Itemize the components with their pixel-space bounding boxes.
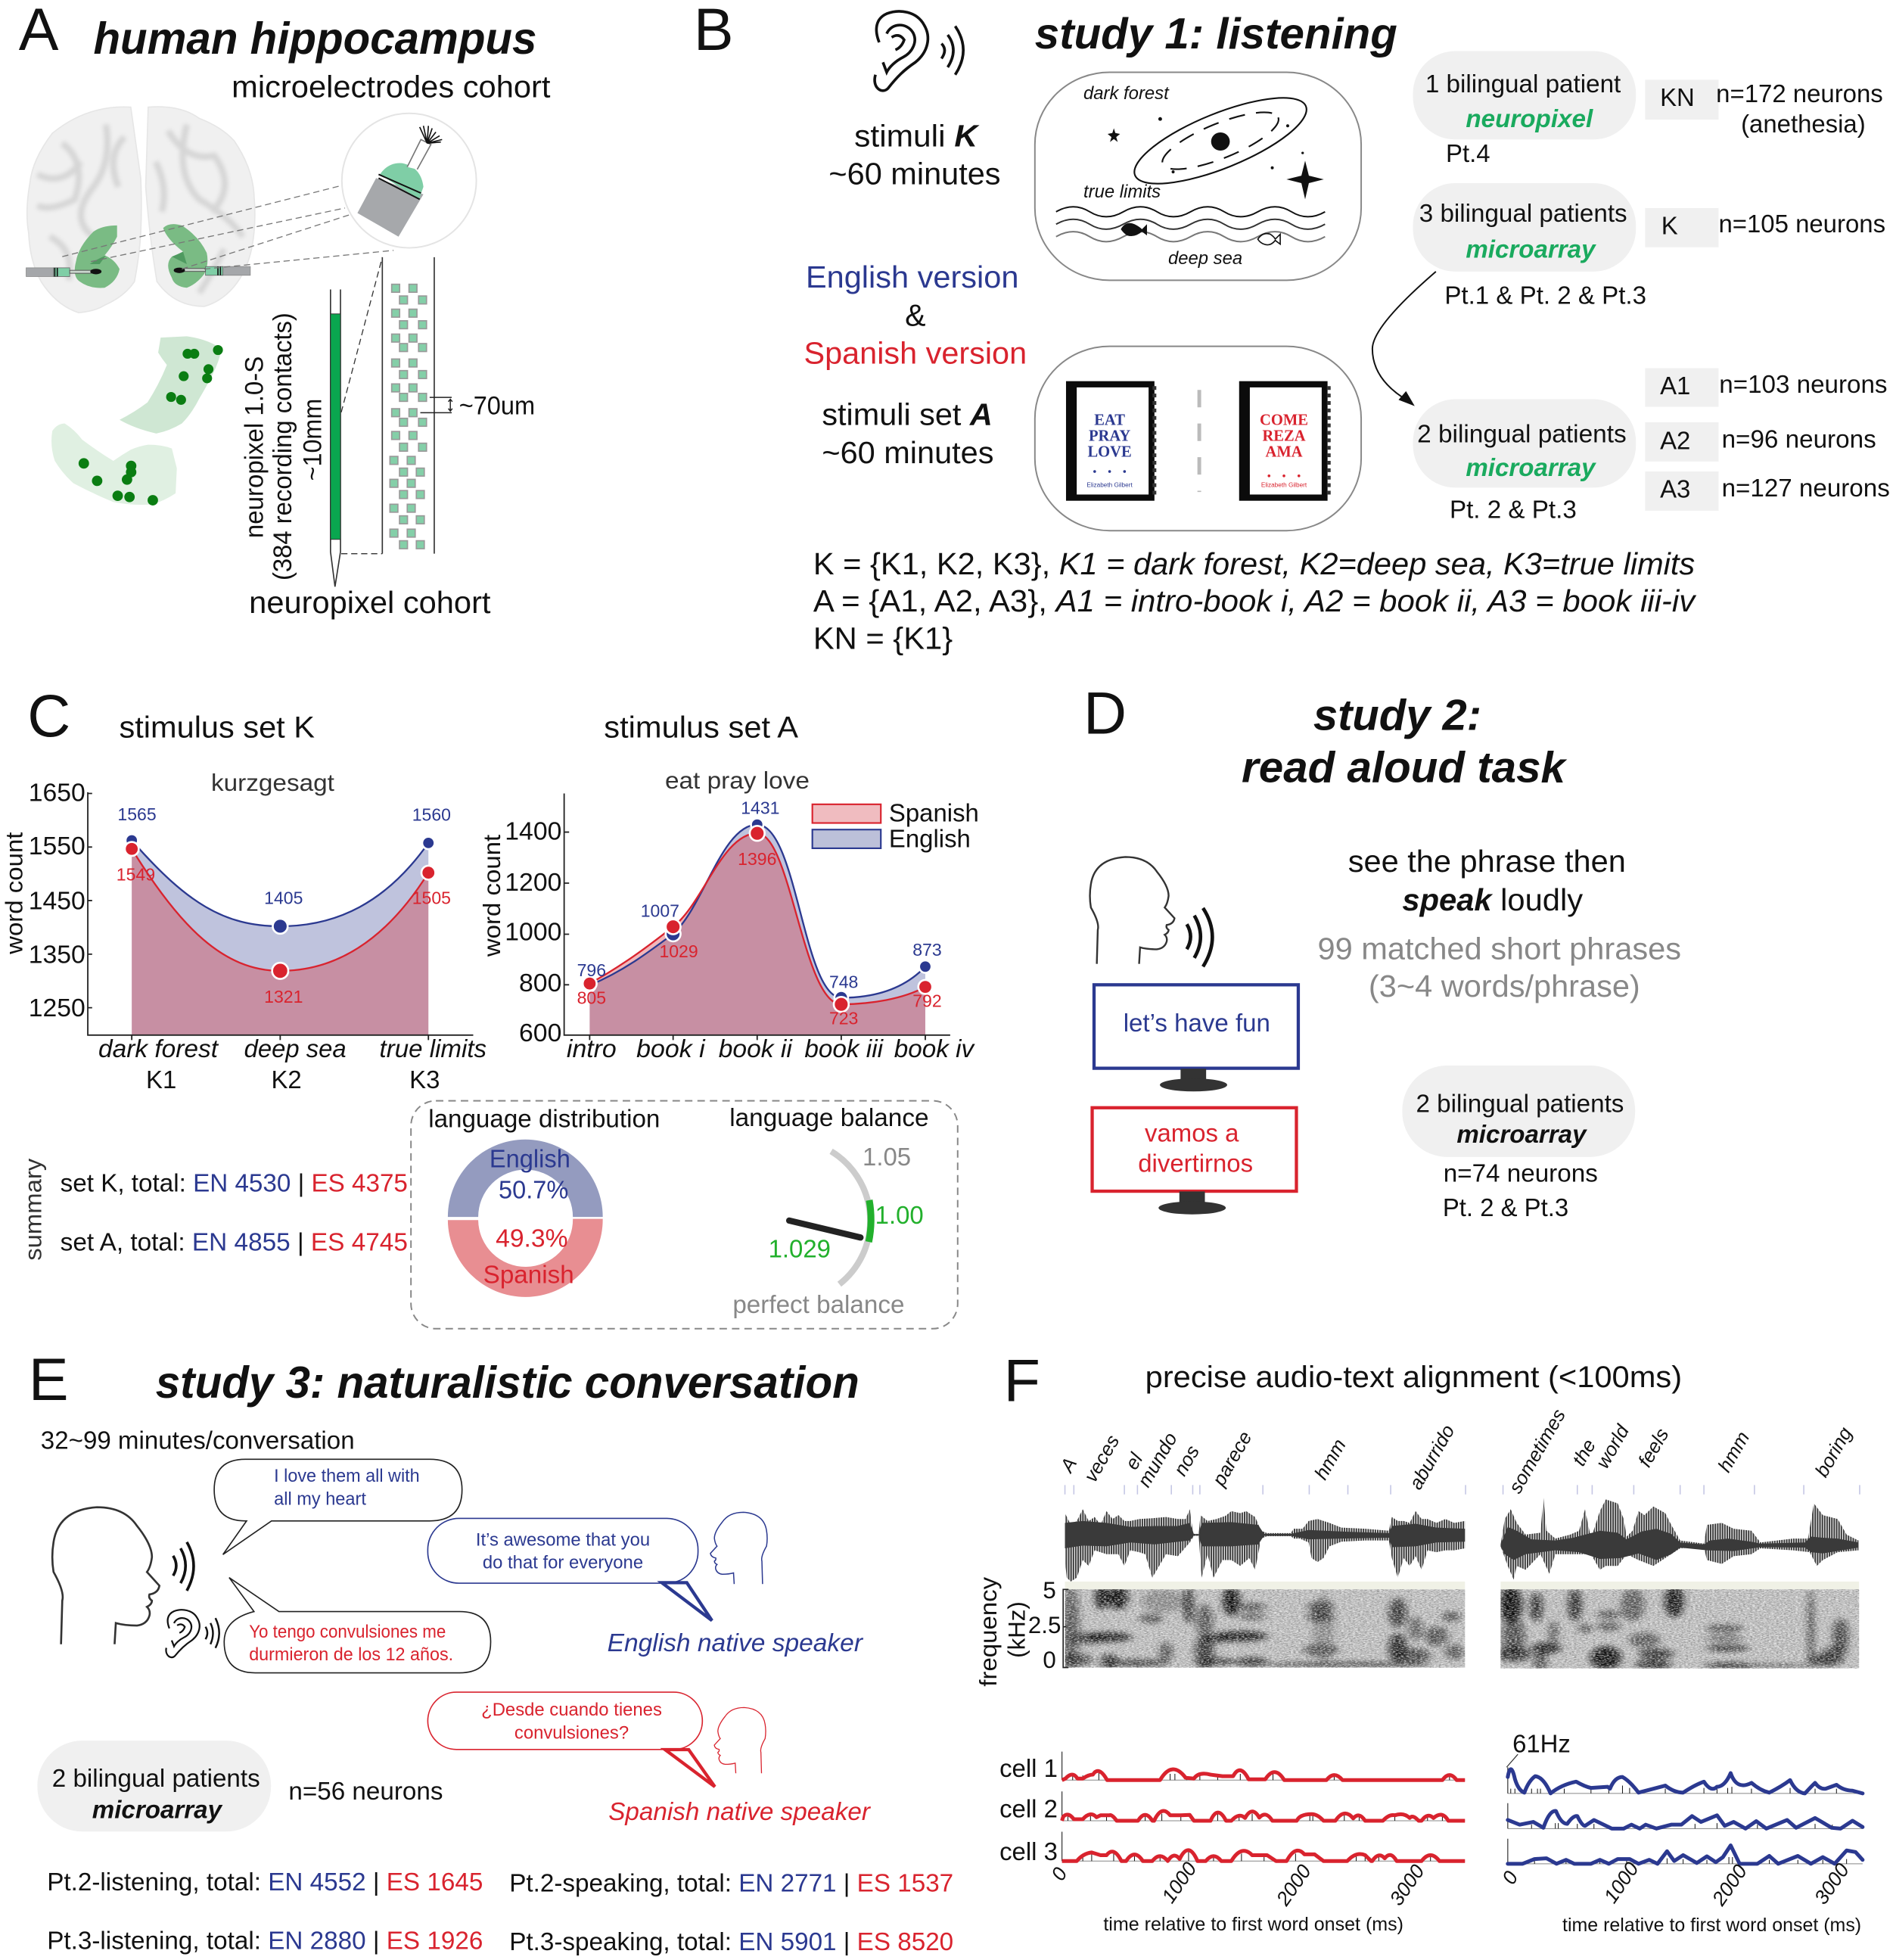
word labels over audio: hmm bbox=[1310, 1436, 1351, 1483]
summary totals: set A, total: EN 4855 | ES 4745 bbox=[61, 1227, 408, 1255]
area chart: set K word counts: 1505 bbox=[412, 888, 451, 908]
cohort: microarray 2 patients: A1 bbox=[1660, 372, 1690, 400]
area chart: set K word counts: deep sea bbox=[244, 1034, 347, 1062]
speech bubble: It's awesome: It’s awesome that you bbox=[476, 1529, 650, 1550]
cohort: microarray 2 patients: n=96 neurons bbox=[1722, 425, 1876, 453]
panel letter D: D bbox=[1083, 680, 1127, 747]
word labels over audio bbox=[1056, 1405, 1857, 1497]
area chart: set K word counts: 1321 bbox=[264, 987, 303, 1006]
spectrogram left bbox=[1062, 1582, 1465, 1672]
label: microelectrodes cohort: microelectrodes cohort bbox=[232, 69, 551, 104]
area chart: set A word counts: eat pray love bbox=[665, 767, 810, 794]
panel letter C: C bbox=[27, 682, 70, 749]
title: study 1 listening: study 1: listening bbox=[1035, 10, 1397, 58]
monitor: Spanish phrase bbox=[1093, 1108, 1296, 1215]
cohort: read aloud patients bbox=[1402, 1066, 1635, 1221]
cohort: neuropixel patient: neuropixel bbox=[1466, 104, 1593, 133]
donut chart: language distribution: language distribution bbox=[428, 1105, 660, 1133]
speech bubble: Yo tengo convulsiones: Yo tengo convulsiones me bbox=[249, 1622, 446, 1642]
cohort: microarray 2 patients: A3 bbox=[1660, 475, 1690, 503]
electrode contact array bbox=[390, 285, 427, 549]
word labels over audio: boring bbox=[1811, 1423, 1857, 1481]
cohort: read aloud patients: microarray bbox=[1456, 1120, 1588, 1149]
area chart: set A word counts: intro bbox=[567, 1034, 617, 1062]
area chart: set A word counts: 1029 bbox=[659, 941, 698, 961]
label: stimuli set A: stimuli set A bbox=[822, 397, 993, 431]
brain with hippocampi bbox=[26, 107, 255, 313]
spike traces left: red bbox=[1062, 1752, 1465, 1861]
icon: English native speaker head bbox=[710, 1512, 767, 1584]
time axis labels right: 2000 bbox=[1707, 1860, 1752, 1910]
panel D: study 2 read aloud bbox=[1083, 680, 1681, 1221]
panel F: audio-text alignment bbox=[975, 1346, 1863, 1936]
monitor: Spanish phrase: divertirnos bbox=[1138, 1150, 1253, 1178]
neuropixel probe bbox=[331, 257, 434, 586]
book: English cover: EAT bbox=[1094, 412, 1125, 428]
probe labels: (384 recording contacts) bbox=[269, 313, 297, 580]
time axis labels left: 3000 bbox=[1385, 1860, 1429, 1909]
summary totals: set K, total: EN 4530 | ES 4375 bbox=[61, 1169, 408, 1197]
spectrogram axis bbox=[975, 1576, 1068, 1687]
audio waveform left bbox=[1065, 1509, 1465, 1582]
cohort: neuropixel patient: (anethesia) bbox=[1741, 110, 1866, 138]
area chart: set A word counts: 792 bbox=[912, 991, 942, 1011]
area chart: set A word counts: 796 bbox=[577, 960, 606, 980]
time axis labels left: 0 bbox=[1046, 1863, 1072, 1884]
area chart: set K word counts: 1405 bbox=[264, 888, 303, 908]
donut chart: language distribution: 50.7% bbox=[499, 1175, 568, 1204]
stimulus definitions: A = {A1, A2, A3}, A1 = intro-book i, A2 = book ii, A3 = book iii-iv bbox=[813, 583, 1697, 618]
panel letter F: F bbox=[1004, 1346, 1040, 1414]
book: Spanish cover: COME bbox=[1260, 412, 1308, 428]
conversation totals: Pt.2-listening, total: EN 4552 | ES 1645 bbox=[47, 1868, 483, 1896]
area chart: set A word counts: 805 bbox=[577, 988, 606, 1008]
area chart: set A word counts: 723 bbox=[829, 1009, 858, 1028]
instructions text: (3~4 words/phrase) bbox=[1369, 969, 1640, 1003]
monitor: English phrase bbox=[1094, 985, 1298, 1091]
audio waveform right bbox=[1500, 1498, 1858, 1579]
cohort: read aloud patients: 2 bilingual patients bbox=[1416, 1090, 1624, 1118]
speech bubble: Yo tengo convulsiones bbox=[224, 1578, 491, 1673]
label: stimuli set A bbox=[822, 397, 994, 470]
gauge: language balance: perfect balance bbox=[732, 1290, 904, 1318]
label: 61Hz: 61Hz bbox=[1512, 1730, 1571, 1758]
spacing annotation: ~70um bbox=[421, 391, 535, 420]
donut chart: language distribution: Spanish bbox=[483, 1260, 574, 1289]
panel B: study 1 listening bbox=[694, 0, 1890, 656]
cohort: neuropixel patient: n=172 neurons bbox=[1716, 79, 1883, 107]
donut chart: language distribution bbox=[428, 1105, 660, 1297]
time axis labels left: 1000 bbox=[1157, 1858, 1201, 1907]
cohort: microarray 2 patients: Pt. 2 & Pt.3 bbox=[1450, 496, 1577, 524]
conversation totals: Pt.2-speaking, total: EN 2771 | ES 1537 bbox=[509, 1868, 953, 1896]
donut chart: language distribution: English bbox=[490, 1145, 570, 1174]
panel E: study 3 conversation bbox=[29, 1346, 953, 1955]
cell labels: cell 1 bbox=[999, 1754, 1058, 1782]
area chart: set A word counts: 1007 bbox=[641, 901, 679, 920]
speech bubble: Desde cuando tienes: ¿Desde cuando tienes bbox=[481, 1700, 662, 1720]
electrode right bbox=[174, 266, 250, 275]
book: Spanish cover bbox=[1239, 381, 1329, 501]
word labels over audio: nos bbox=[1170, 1442, 1204, 1479]
area chart: set K word counts: 1650 bbox=[29, 778, 85, 807]
probe labels: neuropixel 1.0-S bbox=[240, 356, 269, 538]
speech bubble: I love them: I love them all with bbox=[274, 1466, 420, 1486]
legend bbox=[813, 799, 979, 852]
label: minutes per conversation: 32~99 minutes/conversation bbox=[41, 1426, 355, 1454]
gauge: language balance: 1.00 bbox=[875, 1201, 924, 1229]
area chart: set K word counts bbox=[2, 770, 486, 1094]
instructions text: 99 matched short phrases bbox=[1317, 931, 1681, 966]
label: stimuli set A: ~60 minutes bbox=[822, 435, 994, 470]
time axis labels left: time relative to first word onset (ms) bbox=[1103, 1915, 1403, 1935]
time axis labels right: 0 bbox=[1497, 1867, 1523, 1888]
area chart: set K word counts: 1350 bbox=[29, 940, 85, 969]
area chart: set A word counts: book iv bbox=[894, 1034, 976, 1062]
speech bubble: It's awesome: do that for everyone bbox=[483, 1552, 643, 1573]
speech bubble: Desde cuando tienes: convulsiones? bbox=[514, 1722, 629, 1743]
label: neuropixel cohort: neuropixel cohort bbox=[249, 585, 491, 620]
book: Spanish cover: REZA bbox=[1262, 428, 1306, 445]
area chart: set A word counts: 1000 bbox=[505, 918, 561, 947]
summary totals: summary bbox=[20, 1158, 46, 1261]
area chart: set A word counts: word count bbox=[479, 835, 505, 957]
zoom guide lines bbox=[62, 185, 393, 269]
instructions text: see the phrase then bbox=[1348, 844, 1626, 879]
speech bubble: Yo tengo convulsiones: durmieron de los 12 años. bbox=[249, 1644, 453, 1665]
cohort: neuropixel patient: KN bbox=[1660, 83, 1695, 111]
area chart: set A word counts: 873 bbox=[912, 940, 942, 960]
conversation totals: Pt.3-speaking, total: EN 5901 | ES 8520 bbox=[509, 1927, 953, 1955]
area chart: set K word counts: true limits bbox=[380, 1034, 486, 1062]
cohort: microarray 3 patients: 3 bilingual patients bbox=[1419, 199, 1627, 228]
icon: microelectrode magnified circle bbox=[342, 114, 477, 248]
label: Spanish native speaker: Spanish native speaker bbox=[608, 1797, 872, 1825]
probe labels bbox=[240, 313, 328, 580]
area chart: set A word counts: 1400 bbox=[505, 817, 561, 845]
title: study 2 read aloud task: read aloud task bbox=[1242, 744, 1568, 792]
area chart: set A word counts: 748 bbox=[829, 972, 858, 991]
time axis labels right: time relative to first word onset (ms) bbox=[1562, 1915, 1861, 1936]
speech bubble: I love them: all my heart bbox=[274, 1489, 366, 1509]
word labels over audio: veces bbox=[1080, 1431, 1124, 1486]
cohort: neuropixel patient: Pt.4 bbox=[1446, 139, 1490, 167]
time axis labels left: 2000 bbox=[1271, 1860, 1316, 1910]
area chart: set A word counts: 1396 bbox=[738, 849, 776, 869]
cohort: microarray 3 patients: Pt.1 & Pt. 2 & Pt.3 bbox=[1444, 282, 1646, 310]
area chart: set K word counts: dark forest bbox=[98, 1034, 219, 1062]
monitor: Spanish phrase: vamos a bbox=[1145, 1118, 1239, 1146]
area chart: set K word counts: K2 bbox=[271, 1066, 302, 1094]
area chart: set A word counts: 600 bbox=[519, 1019, 561, 1047]
cohort: microarray 2 patients bbox=[1413, 369, 1890, 524]
label: stimuli K: ~60 minutes bbox=[828, 157, 1001, 191]
area chart: set K word counts: K1 bbox=[146, 1066, 176, 1094]
panel A: human hippocampus bbox=[19, 0, 551, 620]
area chart: set K word counts: 1565 bbox=[117, 804, 157, 824]
spacing annotation: ~70um: ~70um bbox=[459, 391, 535, 420]
probe labels: ~10mm bbox=[299, 399, 328, 481]
cohort: read aloud patients: n=74 neurons bbox=[1444, 1159, 1598, 1187]
cohort: microarray 2 patients: 2 bilingual patients bbox=[1417, 419, 1627, 448]
area chart: set K word counts: word count bbox=[2, 832, 28, 955]
area chart: set K word counts: 1250 bbox=[29, 994, 85, 1022]
spectrogram axis: 5 bbox=[1043, 1577, 1056, 1604]
stimulus definitions bbox=[813, 546, 1697, 656]
title: human hippocampus: human hippocampus bbox=[93, 13, 536, 64]
book: English cover: PRAY bbox=[1089, 428, 1130, 445]
word labels over audio: A bbox=[1056, 1454, 1081, 1477]
area chart: set K word counts: kurzgesagt bbox=[211, 770, 334, 796]
legend: English bbox=[889, 824, 971, 852]
book: Spanish cover: Elizabeth Gilbert bbox=[1261, 482, 1307, 489]
cohort: microarray 2 patients: n=127 neurons bbox=[1722, 474, 1890, 502]
title: study 2 read aloud task: study 2: bbox=[1313, 692, 1481, 740]
word labels over audio: mundo bbox=[1134, 1429, 1182, 1491]
stimulus definitions: K = {K1, K2, K3}, K1 = dark forest, K2=deep sea, K3=true limits bbox=[813, 546, 1695, 581]
gauge: language balance bbox=[729, 1103, 929, 1318]
word labels over audio: hmm bbox=[1714, 1428, 1754, 1476]
panel: stimulus K illustration: dark forest bbox=[1083, 83, 1170, 104]
book: English cover bbox=[1066, 381, 1155, 501]
word labels over audio: el bbox=[1121, 1449, 1148, 1473]
label: English and Spanish versions: & bbox=[905, 297, 926, 332]
monitor: English phrase: let’s have fun bbox=[1124, 1009, 1270, 1037]
donut chart: language distribution: 49.3% bbox=[496, 1224, 568, 1253]
time axis labels left bbox=[1046, 1858, 1429, 1935]
instructions text: speak loudly bbox=[1402, 882, 1583, 917]
cohort: neuropixel patient: 1 bilingual patient bbox=[1425, 70, 1621, 98]
summary totals bbox=[20, 1158, 408, 1261]
gauge: language balance: 1.029 bbox=[769, 1235, 831, 1263]
speech bubble: It's awesome bbox=[427, 1518, 712, 1620]
cohort: read aloud patients: Pt. 2 & Pt.3 bbox=[1443, 1193, 1568, 1221]
stimulus definitions: KN = {K1} bbox=[813, 621, 953, 656]
word labels over audio: sometimes bbox=[1505, 1405, 1570, 1497]
spectrogram axis: (kHz) bbox=[1004, 1601, 1030, 1658]
arrow between cohorts bbox=[1372, 272, 1436, 406]
word labels over audio: parece bbox=[1208, 1428, 1257, 1490]
speech bubble: I love them bbox=[214, 1459, 462, 1554]
area chart: set A word counts bbox=[479, 767, 979, 1062]
panel: stimulus K illustration: true limits bbox=[1083, 182, 1161, 202]
electrode left bbox=[26, 268, 101, 276]
word onset ticks bbox=[1065, 1485, 1860, 1495]
word labels over audio: the bbox=[1568, 1436, 1600, 1470]
area chart: set A word counts: book ii bbox=[719, 1034, 794, 1062]
spectrogram right bbox=[1496, 1582, 1859, 1672]
word labels over audio: aburrido bbox=[1405, 1421, 1459, 1493]
area chart: set A word counts: 800 bbox=[519, 969, 561, 997]
icon: ear with sound waves bbox=[875, 11, 963, 91]
icon: patient head with speech and hearing bbox=[52, 1507, 219, 1657]
area chart: set K word counts: 1450 bbox=[29, 887, 85, 916]
cohort: microarray 2 patients: microarray bbox=[1466, 453, 1597, 482]
icon: speaking head bbox=[1090, 857, 1212, 966]
time axis labels right bbox=[1497, 1858, 1861, 1936]
panel: stimulus K illustration bbox=[1035, 72, 1361, 280]
panel: stimulus A books bbox=[1035, 347, 1361, 530]
label: English and Spanish versions: English version bbox=[806, 260, 1018, 294]
cohort: microarray 2 patients: A2 bbox=[1660, 426, 1690, 454]
conversation totals: Pt.3-listening, total: EN 2880 | ES 1926 bbox=[47, 1926, 483, 1954]
chart heading: stimulus set A: stimulus set A bbox=[604, 711, 799, 744]
label: English and Spanish versions: Spanish version bbox=[804, 336, 1027, 371]
cell labels bbox=[999, 1754, 1058, 1865]
label: stimuli K: stimuli K bbox=[854, 119, 981, 154]
panel: language summary box bbox=[411, 1101, 958, 1329]
speech bubble: Desde cuando tienes bbox=[427, 1692, 715, 1787]
spike traces right: blue bbox=[1506, 1754, 1863, 1864]
panel C: word counts bbox=[2, 682, 979, 1329]
instructions text bbox=[1317, 844, 1681, 1003]
area chart: set A word counts: book i bbox=[636, 1034, 706, 1062]
book: Spanish cover: AMA bbox=[1265, 443, 1303, 460]
title: study 3 naturalistic conversation: study 3: naturalistic conversation bbox=[156, 1357, 859, 1408]
area chart: set A word counts: 1200 bbox=[505, 868, 561, 897]
label: English native speaker: English native speaker bbox=[608, 1629, 864, 1657]
cohort: microarray 3 patients: n=105 neurons bbox=[1718, 210, 1885, 238]
time axis labels right: 3000 bbox=[1810, 1859, 1854, 1909]
cohort: conversation patients bbox=[37, 1741, 443, 1831]
spectrogram axis: frequency bbox=[975, 1576, 1002, 1687]
cohort: conversation patients: 2 bilingual patients bbox=[52, 1764, 260, 1793]
cohort: neuropixel patient bbox=[1413, 51, 1883, 167]
icon: Spanish native speaker head bbox=[714, 1707, 766, 1773]
gauge: language balance: 1.05 bbox=[863, 1143, 911, 1171]
area chart: set A word counts: 1431 bbox=[741, 798, 780, 818]
hippocampus with recording sites, upper bbox=[120, 336, 223, 434]
panel: stimulus K illustration: deep sea bbox=[1168, 248, 1242, 269]
area chart: set K word counts: 1560 bbox=[412, 805, 451, 825]
title: precise audio-text alignment: precise audio-text alignment (<100ms) bbox=[1145, 1361, 1682, 1394]
conversation totals bbox=[47, 1868, 953, 1955]
spectrogram axis: 2.5 bbox=[1028, 1612, 1061, 1638]
label: stimuli K bbox=[828, 119, 1001, 191]
spectrogram axis: 0 bbox=[1043, 1647, 1056, 1673]
cell labels: cell 3 bbox=[999, 1837, 1058, 1865]
label: English and Spanish versions bbox=[804, 260, 1027, 371]
audio and spike data in crop coordinates bbox=[1062, 1485, 1863, 1864]
panel letter E: E bbox=[29, 1346, 69, 1413]
area chart: set K word counts: K3 bbox=[409, 1066, 440, 1094]
title: study 2 read aloud task bbox=[1242, 692, 1568, 792]
legend: Spanish bbox=[889, 799, 979, 827]
area chart: set K word counts: 1549 bbox=[117, 865, 155, 885]
cohort: conversation patients: n=56 neurons bbox=[288, 1777, 443, 1805]
area chart: set A word counts: book iii bbox=[804, 1034, 884, 1062]
area chart: set K word counts: 1550 bbox=[29, 832, 85, 860]
word labels over audio: world bbox=[1592, 1421, 1633, 1472]
book: English cover: LOVE bbox=[1087, 443, 1132, 460]
book: English cover: Elizabeth Gilbert bbox=[1086, 482, 1133, 489]
cohort: microarray 2 patients: n=103 neurons bbox=[1719, 370, 1888, 398]
hippocampus with recording sites, lower bbox=[51, 424, 177, 506]
time axis labels right: 1000 bbox=[1599, 1858, 1643, 1907]
cell labels: cell 2 bbox=[999, 1794, 1058, 1822]
word labels over audio: feels bbox=[1634, 1425, 1674, 1471]
gauge: language balance: language balance bbox=[729, 1103, 929, 1131]
cohort: microarray 3 patients bbox=[1413, 183, 1885, 310]
cohort: microarray 3 patients: microarray bbox=[1466, 235, 1597, 264]
chart heading: stimulus set K: stimulus set K bbox=[120, 711, 315, 744]
cohort: microarray 3 patients: K bbox=[1661, 211, 1678, 239]
cohort: conversation patients: microarray bbox=[92, 1796, 223, 1825]
